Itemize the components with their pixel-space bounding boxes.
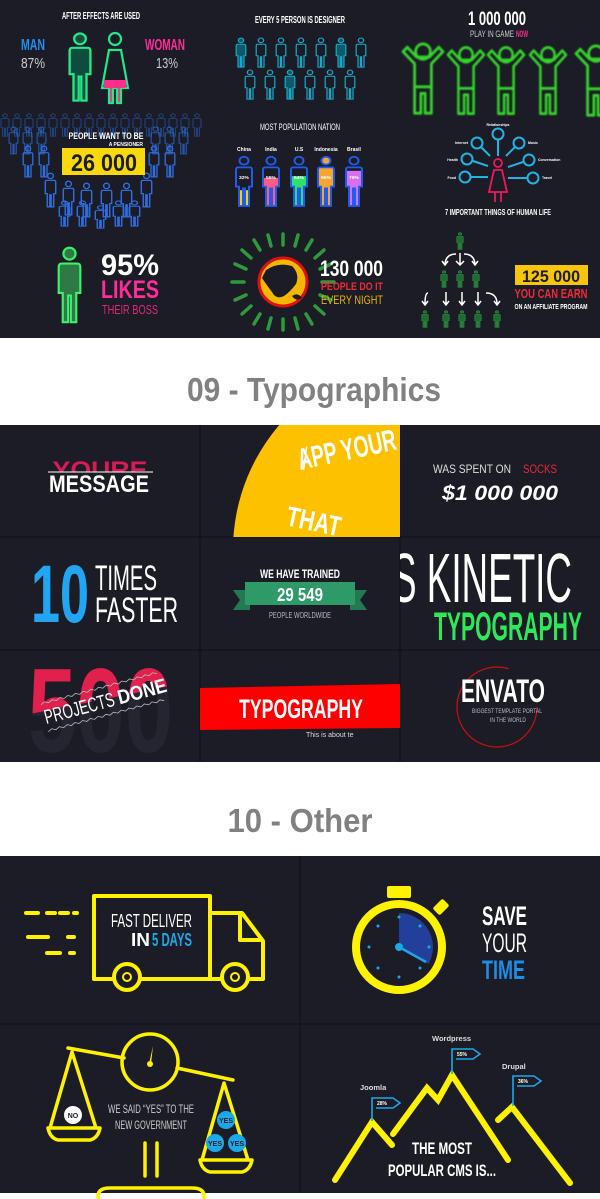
text: fast deliver in 5 days: FAST DELIVER: [111, 911, 192, 931]
chart: population people: Brasil: [347, 147, 362, 153]
chart: cms mountains: THE MOST: [412, 1139, 472, 1158]
cell: was spent on socks: SOCKS: [523, 462, 557, 476]
cell: envato: ENVATO: [461, 673, 545, 709]
text: save your time: [482, 901, 527, 985]
text: save your time: YOUR: [482, 928, 527, 958]
icon: no and yes balls: YES: [230, 1141, 244, 1148]
text: we said yes to the new government: [108, 1102, 194, 1132]
icon: no and yes balls: [64, 1106, 246, 1152]
cell: youre message: MESSAGE: [49, 471, 149, 498]
chart: population people: 95%: [321, 175, 332, 180]
icons: designer people: [236, 38, 366, 99]
chart: population people: India: [265, 147, 277, 153]
cell: we have trained ribbon: PEOPLE WORLDWIDE: [269, 611, 331, 620]
diagram: 7 important things of human life: [445, 123, 560, 217]
cell: yellow circle kinetic text: ȺPP YOUR: [295, 424, 399, 477]
chart: population people: China: [237, 147, 251, 153]
cell: 500 projects done: DONE: [115, 675, 169, 709]
cell: 500 projects done: 500: [28, 644, 173, 778]
chart: cms mountains: Wordpress: [432, 1034, 471, 1043]
icon: no and yes balls: YES: [219, 1118, 233, 1125]
text: 130 000 people do it every night: EVERY NIGHT: [321, 293, 384, 307]
text: woman 13%: 13%: [156, 55, 178, 72]
text: fast deliver in 5 days: [111, 911, 192, 950]
icon: stopwatch: [356, 886, 449, 990]
cell: we have trained ribbon: WE HAVE TRAINED: [260, 567, 340, 581]
chart: population people: U.S: [295, 147, 304, 153]
chart: cms mountains: 55%: [457, 1052, 468, 1058]
icon: no and yes balls: YES: [208, 1141, 222, 1148]
chart: cms mountains: [335, 1034, 570, 1183]
icons: jumping players: [403, 44, 600, 115]
diagram: 7 important things of human life: Internet: [455, 141, 469, 145]
cell: envato: BIGGEST TEMPLATE PORTAL: [472, 709, 543, 715]
cell: kinetic typography: [400, 553, 582, 640]
diagram: affiliate tree: [422, 233, 500, 327]
icon: delivery truck: [26, 896, 263, 990]
text: 130 000 people do it every night: 130 000: [320, 256, 383, 281]
cell: 500 projects done: 500: [28, 644, 173, 778]
cell: 10 times faster: FASTER: [95, 591, 178, 630]
text: 130 000 people do it every night: PEOPLE DO IT: [321, 281, 383, 293]
diagram: 7 important things of human life: Conversation: [538, 158, 560, 162]
heading: 10 - other: 10 - Other: [228, 802, 373, 839]
text: man 87%: [21, 37, 45, 72]
icon: no and yes balls: NO: [68, 1113, 79, 1120]
text: 1 000 000 play in game now: [468, 9, 528, 39]
text: 95% likes their boss: LIKES: [101, 276, 159, 304]
text: 130 000 people do it every night: [320, 256, 384, 307]
callout: people want to be a pensioner 26 000: [62, 131, 145, 177]
chart: population people: 55%: [266, 175, 277, 180]
icon: man: [70, 33, 90, 101]
cell: 10 times faster: TIMES: [95, 559, 157, 598]
icon: green person likes boss: [59, 248, 80, 322]
chart: population people: 79%: [349, 175, 360, 180]
cell: yellow circle kinetic text: [233, 425, 400, 537]
diagram: 7 important things of human life: Relationships: [487, 123, 510, 127]
cell: 10 times faster: 10: [31, 549, 89, 640]
panel: typographics grid: [0, 425, 600, 762]
cell: was spent on socks: WAS SPENT ON: [433, 462, 511, 476]
chart: population people: 32%: [239, 175, 250, 180]
text: save your time: SAVE: [482, 901, 527, 931]
icon: woman: [102, 33, 128, 103]
cell: youre message: YOURE: [52, 457, 148, 484]
diagram: 7 important things of human life: Music: [528, 141, 538, 145]
callout: people want to be a pensioner 26 000: PEOPLE WANT TO BE: [68, 131, 144, 141]
cell: 500 projects done: PROJECTS: [42, 689, 117, 729]
cell: youre message: [48, 457, 153, 498]
cell: typography red bar: TYPOGRAPHY: [239, 694, 363, 724]
text: woman 13%: WOMAN: [145, 37, 185, 54]
cell: yellow circle kinetic text: THAT: [284, 501, 344, 542]
callout: 125 000 you can earn: 125 000: [522, 267, 580, 286]
cell: 10 times faster: [31, 549, 178, 640]
text: save your time: TIME: [482, 955, 525, 985]
cell: envato: IN THE WORLD: [490, 718, 527, 724]
text: man 87%: MAN: [21, 37, 45, 54]
cell: envato: [457, 667, 545, 747]
icon: scales: [48, 1034, 252, 1199]
callout: people want to be a pensioner 26 000: 26 000: [71, 150, 137, 177]
heading: after effects are used: AFTER EFFECTS ARE USED: [62, 11, 140, 22]
diagram: 7 important things of human life: Health: [447, 158, 458, 162]
text: man 87%: 87%: [21, 55, 45, 72]
diagram: 7 important things of human life: Food: [447, 176, 456, 180]
cell: we have trained ribbon: [233, 567, 367, 620]
text: 95% likes their boss: 95%: [101, 249, 159, 282]
chart: population people: [234, 147, 364, 208]
chart: cms mountains: Joomla: [360, 1083, 387, 1092]
cell: 500 projects done: [31, 668, 169, 753]
chart: population people: 64%: [294, 175, 305, 180]
callout: 125 000 you can earn: [514, 265, 588, 311]
panel: other grid: [0, 856, 600, 1199]
chart: cms mountains: 36%: [518, 1079, 529, 1085]
text: we said yes to the new government: WE SAID “YES” TO THE: [108, 1102, 194, 1116]
diagram: 7 important things of human life: Travel: [542, 176, 552, 180]
text: 1 000 000 play in game now: NOW: [516, 29, 528, 39]
chart: population people: Indonesia: [314, 147, 338, 153]
text: 1 000 000 play in game now: 1 000 000: [468, 9, 526, 30]
text: 1 000 000 play in game now: PLAY IN GAME: [470, 29, 514, 39]
heading: 09 - typographics: 09 - Typographics: [187, 371, 441, 408]
cell: typography red bar: This is about te: [306, 732, 354, 739]
icons: blue crowd: [1, 114, 201, 228]
text: 95% likes their boss: THEIR BOSS: [102, 302, 158, 317]
cell: was spent on socks: $1 000 000: [441, 482, 558, 505]
chart: cms mountains: POPULAR CMS IS...: [388, 1161, 496, 1180]
callout: people want to be a pensioner 26 000: A PENSIONER: [109, 142, 143, 148]
panel: infographics: [0, 0, 600, 338]
heading: most population nation: MOST POPULATION NATION: [260, 122, 340, 132]
text: 95% likes their boss: [101, 249, 159, 317]
cell: we have trained ribbon: 29 549: [277, 585, 323, 605]
text: woman 13%: [145, 37, 185, 72]
heading: every 5 person is designer: EVERY 5 PERSON IS DESIGNER: [255, 15, 345, 26]
icon: globe with people ring: [232, 234, 334, 330]
cell: typography red bar: [200, 684, 400, 739]
text: fast deliver in 5 days: IN: [131, 930, 150, 950]
chart: cms mountains: Drupal: [502, 1062, 526, 1071]
text: fast deliver in 5 days: 5 DAYS: [152, 930, 192, 950]
cell: was spent on socks: [433, 462, 558, 505]
chart: cms mountains: 28%: [377, 1101, 388, 1107]
text: we said yes to the new government: NEW GOVERNMENT: [115, 1118, 187, 1132]
